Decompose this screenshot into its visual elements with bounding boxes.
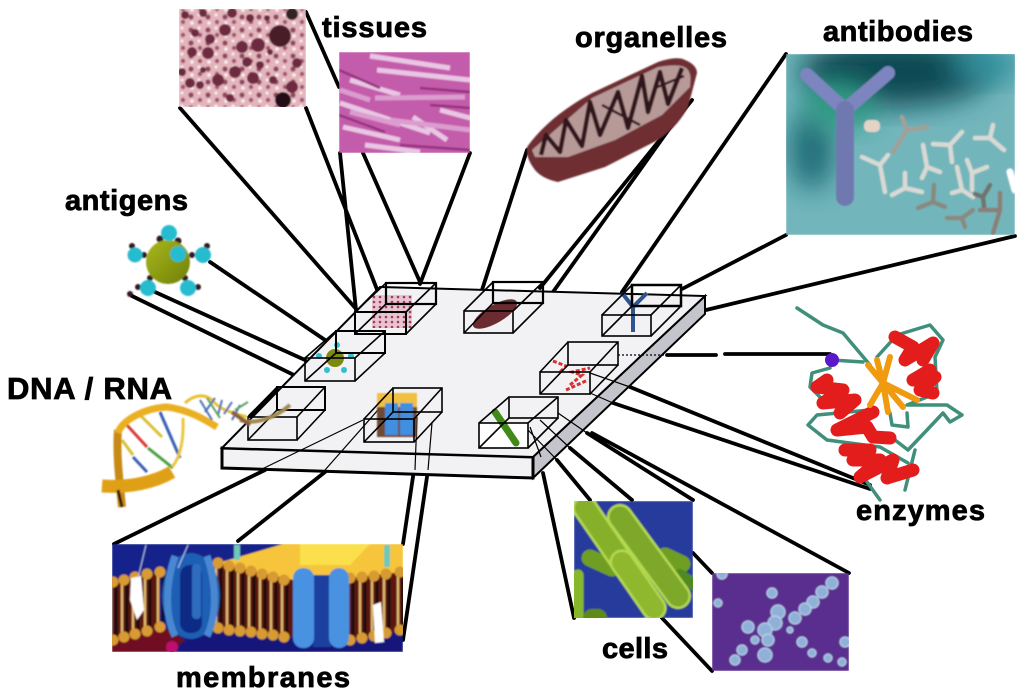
label: cells: cells (602, 633, 668, 665)
image: antigen molecule (127, 225, 211, 297)
image: tissue micrograph 2 (339, 52, 470, 153)
antibody box (602, 285, 681, 336)
platform slab (222, 287, 705, 478)
antigen miniature (316, 342, 354, 373)
antibody miniature (622, 293, 647, 332)
image: DNA helix (102, 396, 290, 507)
label: DNA / RNA: DNA / RNA (7, 371, 172, 406)
membrane box (364, 388, 442, 442)
membrane miniature (377, 393, 417, 437)
label: enzymes: enzymes (856, 495, 985, 527)
image: cocci chains (712, 569, 850, 671)
image: membrane (108, 544, 406, 653)
image: rod bacteria (574, 501, 695, 625)
cell miniature (495, 412, 516, 443)
organelle miniature (469, 294, 521, 334)
label: organelles: organelles (575, 22, 727, 54)
image: tissue micrograph 1 (178, 8, 306, 108)
label: membranes: membranes (176, 662, 350, 694)
image: enzyme protein (797, 308, 962, 500)
label: tissues: tissues (322, 12, 427, 44)
label: antigens: antigens (65, 185, 188, 217)
image: antibodies (786, 54, 1015, 235)
DNA box (248, 387, 325, 440)
cell box (479, 397, 558, 448)
enzyme miniature (553, 361, 590, 390)
tissue box (355, 283, 436, 334)
thin lines across the platform (260, 355, 667, 470)
label: antibodies: antibodies (823, 16, 973, 48)
enzyme box (540, 342, 618, 394)
image: mitochondrion (527, 58, 697, 182)
tissue miniature (372, 295, 412, 328)
organelle box (464, 282, 543, 334)
antigen box (305, 331, 385, 381)
